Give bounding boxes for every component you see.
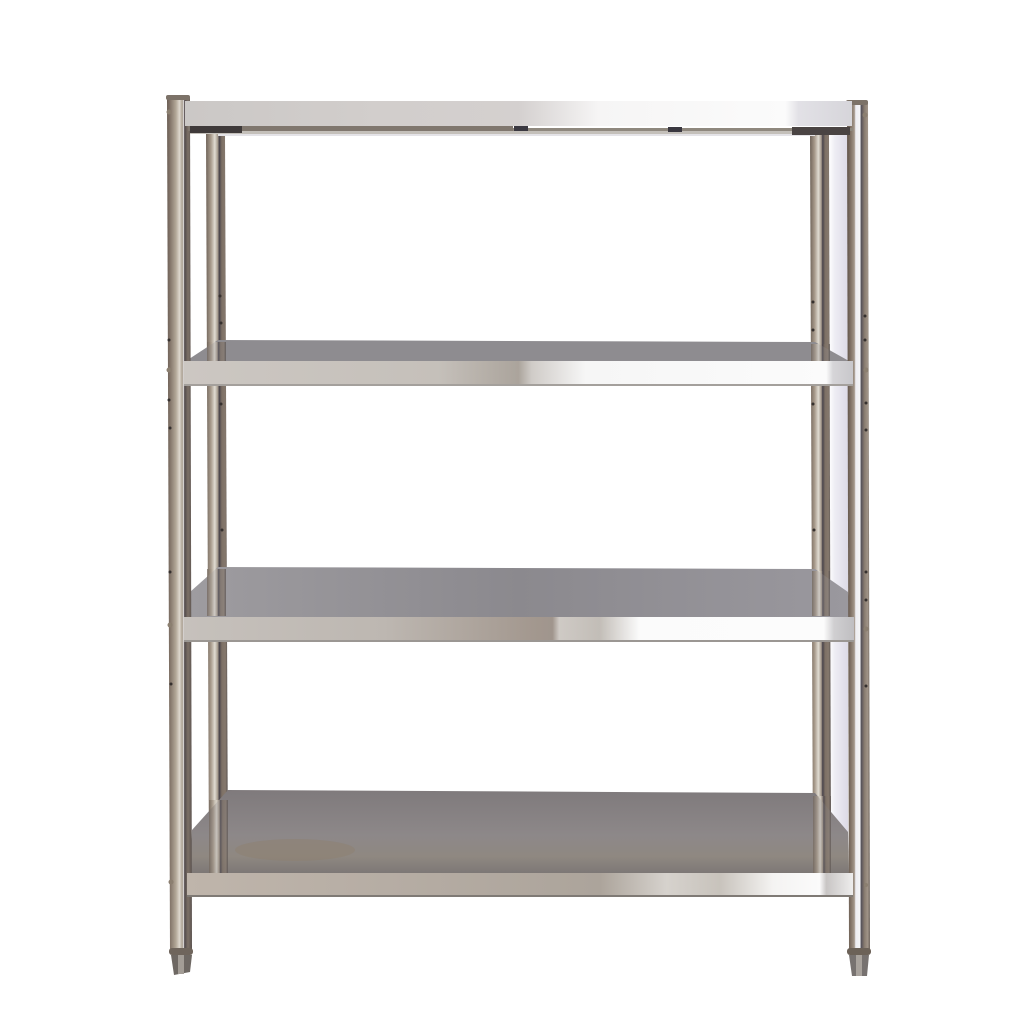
back right post — [810, 134, 831, 873]
tier 3 front beam — [184, 617, 854, 642]
top shelf under-rail — [188, 126, 853, 136]
back left post — [206, 132, 228, 873]
front right foot — [847, 948, 871, 976]
shelf plate: tier 4 — [190, 790, 849, 873]
post bolts and adjustment holes — [166, 110, 868, 887]
shelf plate: tier 2 — [186, 340, 849, 361]
front left post — [166, 95, 192, 950]
back post fronts over plates — [207, 342, 831, 873]
shelf plate: tier 3 — [186, 567, 851, 617]
top shelf front beam — [185, 101, 852, 126]
front right post — [846, 100, 870, 950]
tier 4 front beam — [187, 873, 853, 897]
light side gap on right — [829, 134, 848, 834]
tier 2 front beam — [184, 361, 853, 386]
floor smudge on bottom shelf — [235, 839, 355, 861]
front left foot — [169, 948, 193, 975]
